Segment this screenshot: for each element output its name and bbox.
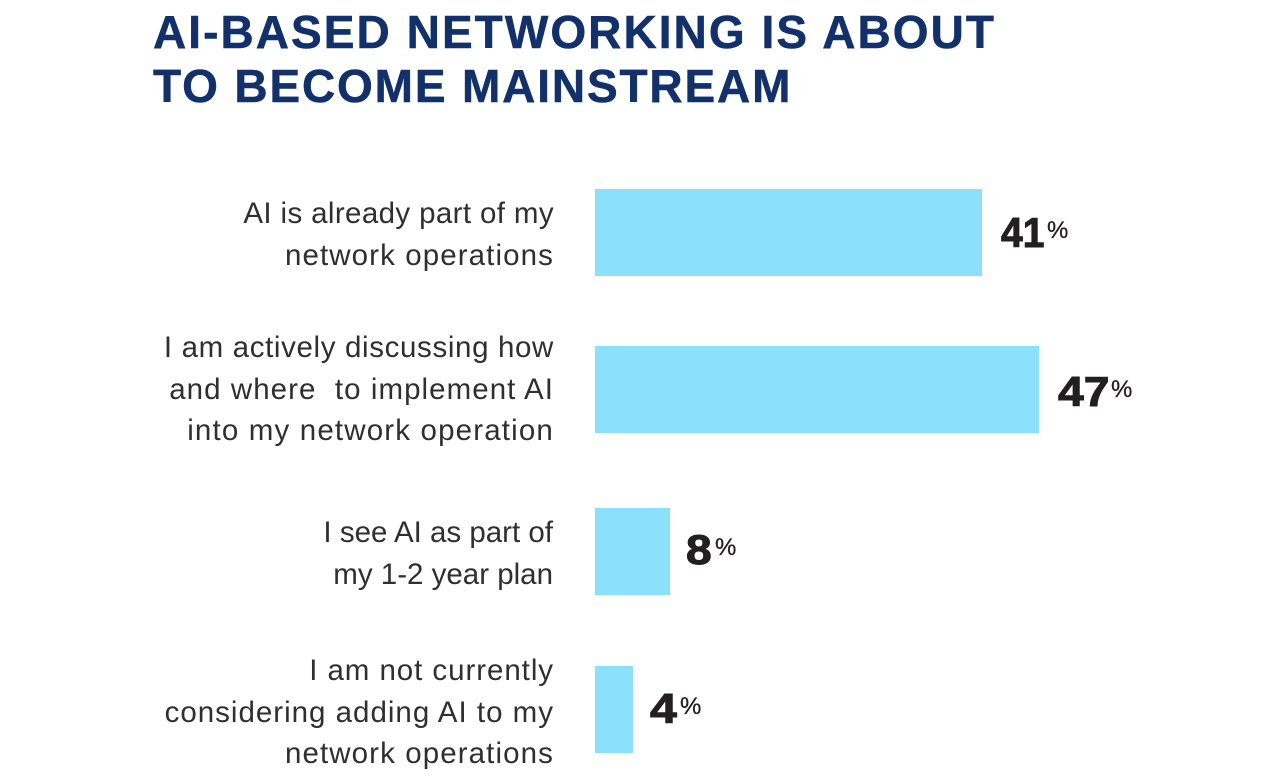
value: 47% <box>1058 368 1132 415</box>
label: actively discussing: I am actively discussing how <box>164 331 554 364</box>
label: 1-2 year plan <box>323 516 553 590</box>
label: actively discussing <box>164 331 554 447</box>
label: not considering: I am not currently <box>309 654 554 687</box>
label: not considering: network operations <box>285 737 554 770</box>
label: not considering: considering adding AI to my <box>165 696 554 728</box>
bar: 8% <box>595 508 670 595</box>
label: not considering <box>165 654 554 770</box>
label: already part: AI is already part of my <box>243 197 554 230</box>
label: actively discussing: and where to implement AI <box>169 372 554 406</box>
label: already part <box>243 197 554 272</box>
label: already part: network operations <box>285 238 554 272</box>
value: 4%: 4 <box>650 685 677 732</box>
value: 41% <box>1001 209 1068 256</box>
value: 8%: 8 <box>686 526 712 573</box>
bar: 4% <box>595 666 633 753</box>
title: TO BECOME MAINSTREAM <box>153 60 792 112</box>
title <box>153 6 996 112</box>
value: 4%: % <box>680 693 701 720</box>
bar: 47% <box>595 346 1039 433</box>
bar: 41% <box>595 189 982 276</box>
value: 41%: % <box>1047 217 1068 244</box>
value: 8%: % <box>715 534 736 561</box>
value: 47%: 47 <box>1058 368 1109 415</box>
label: actively discussing: into my network operation <box>187 414 554 447</box>
title: AI-BASED NETWORKING IS ABOUT <box>153 6 996 58</box>
value: 41%: 41 <box>1001 209 1044 256</box>
label: 1-2 year plan: my 1-2 year plan <box>333 558 553 590</box>
value: 8% <box>686 526 736 573</box>
label: 1-2 year plan: I see AI as part of <box>323 516 553 549</box>
value: 4% <box>650 685 701 732</box>
value: 47%: % <box>1111 376 1132 403</box>
